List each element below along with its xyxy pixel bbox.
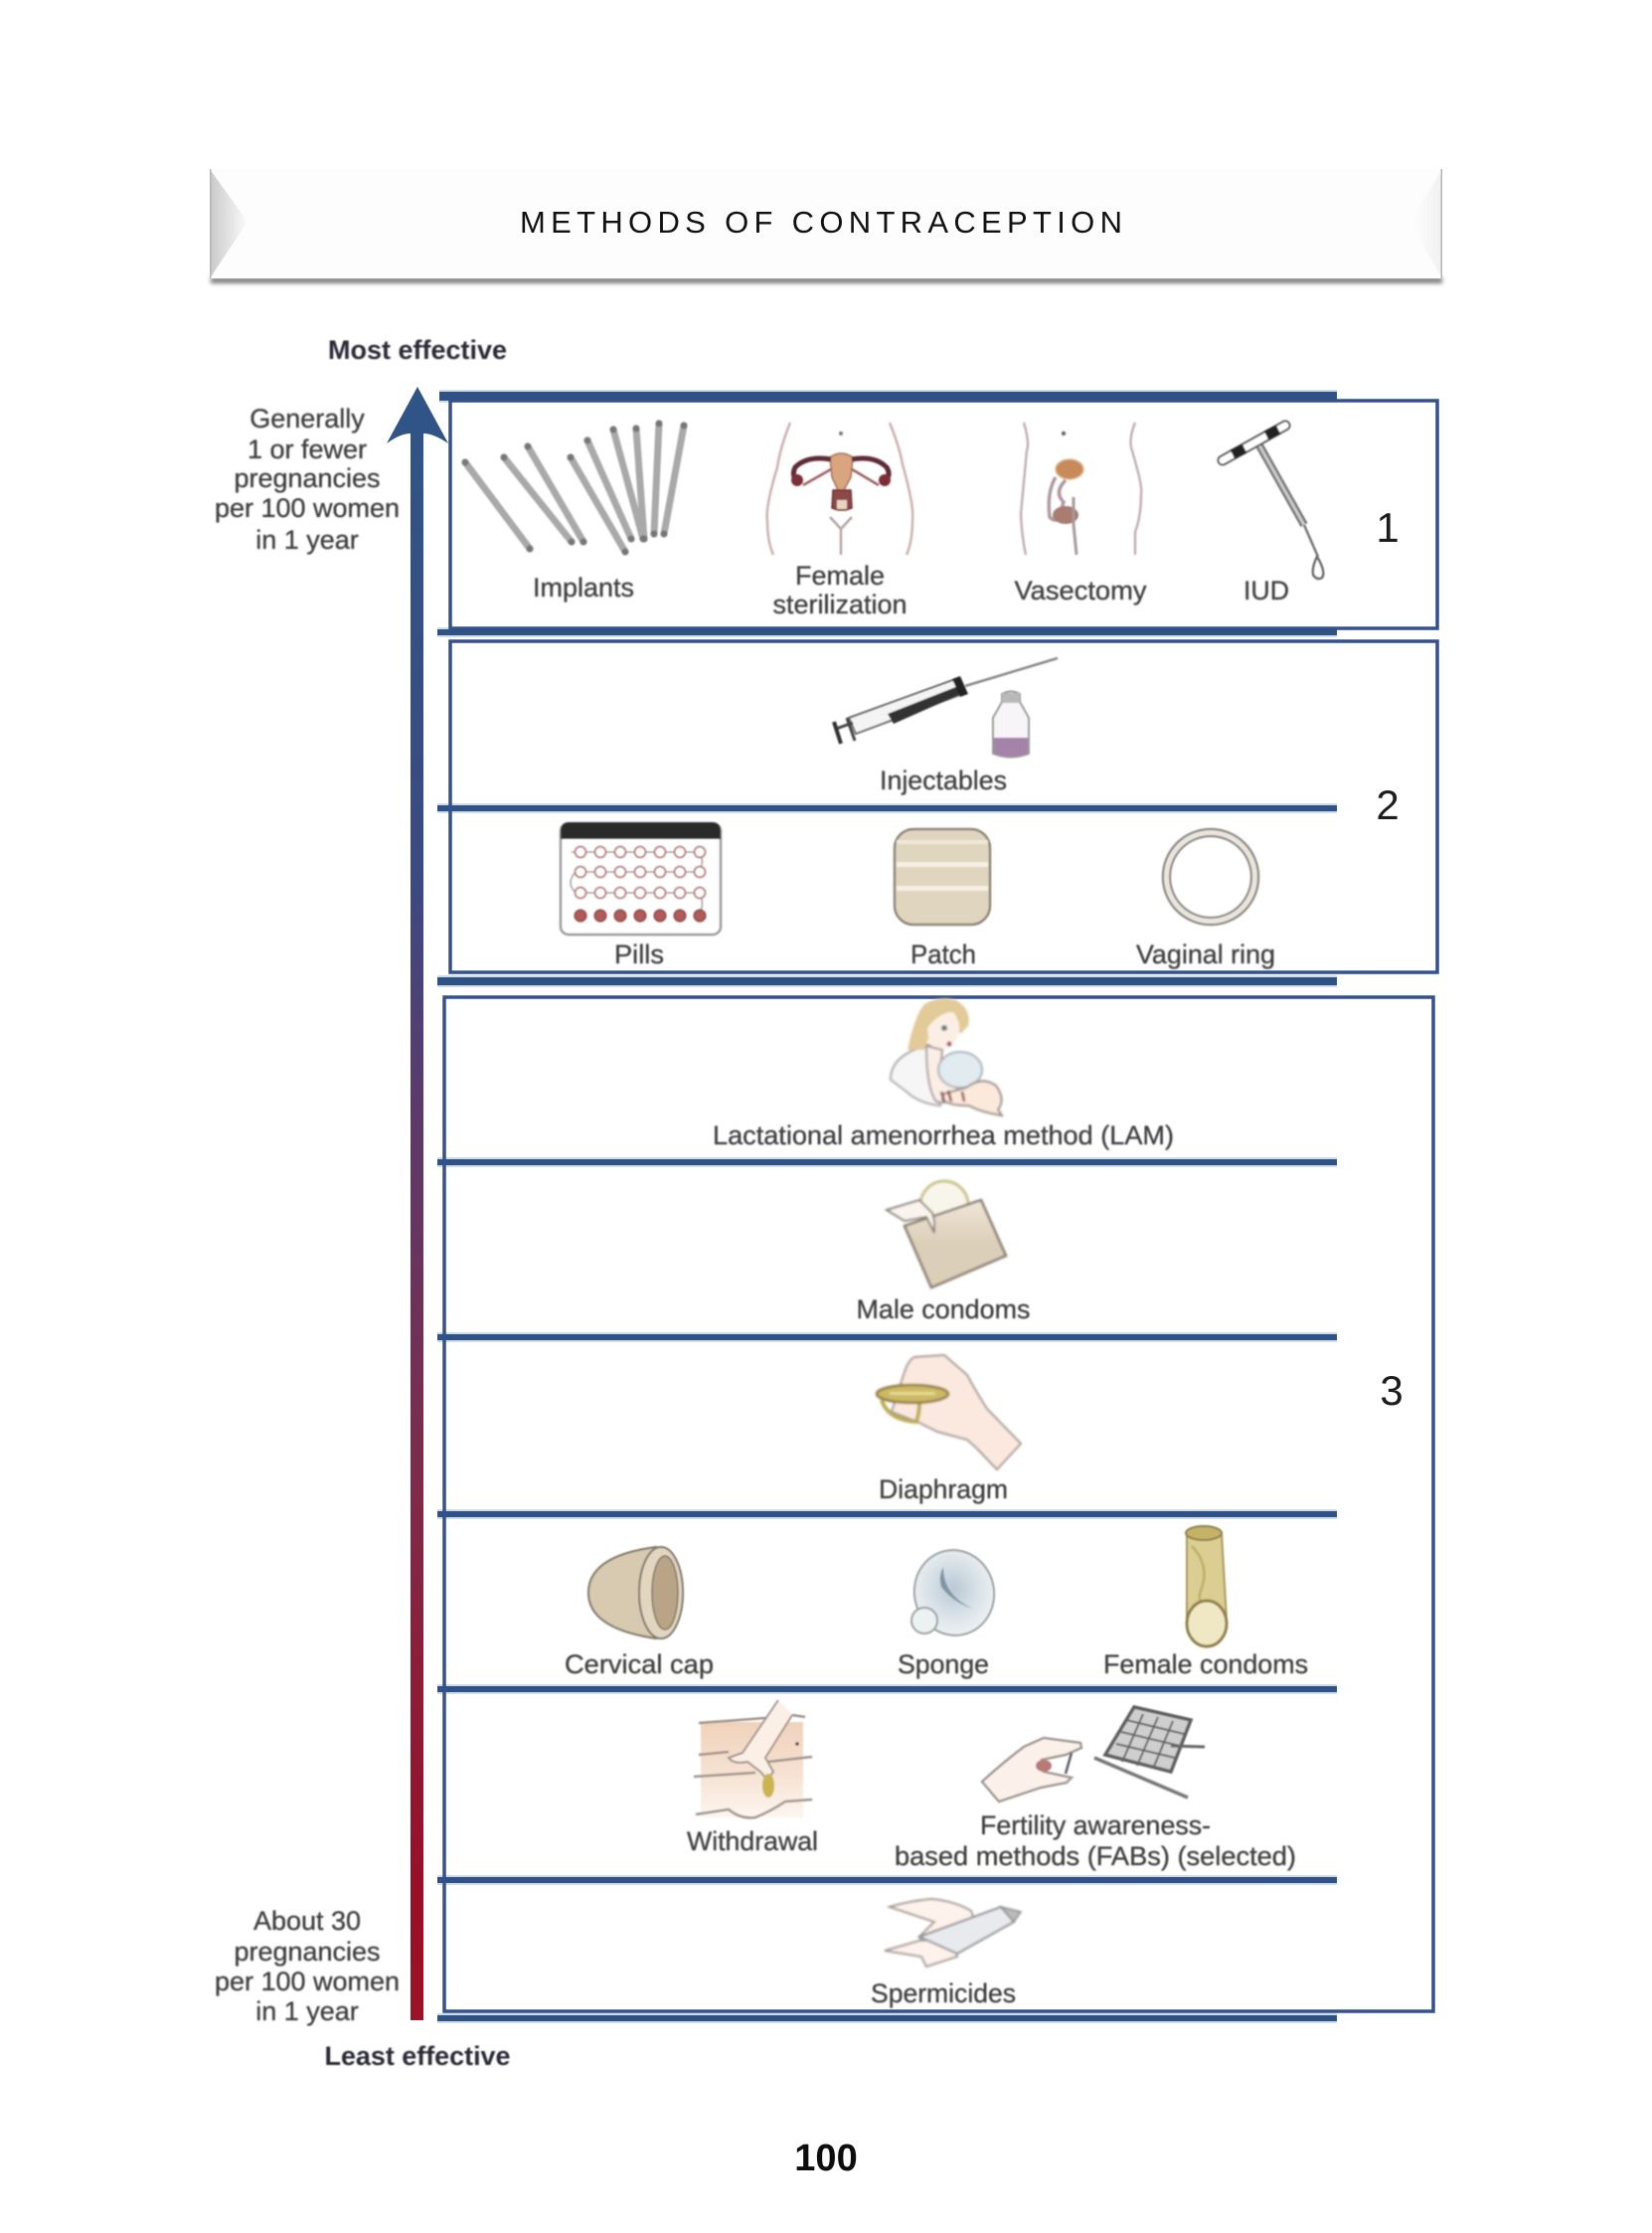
panel: tier 1	[450, 401, 1437, 628]
icon: sponge	[907, 1543, 1002, 1642]
label: diaphragm: Diaphragm	[879, 1474, 1008, 1504]
icon: IUD	[1223, 426, 1323, 579]
label: spermicides: Spermicides	[871, 1978, 1016, 2008]
text: least effective rate	[215, 1906, 400, 2026]
icon: pill pack	[561, 822, 721, 935]
effectiveness arrow	[387, 387, 448, 2020]
label: cervical cap: Cervical cap	[565, 1649, 714, 1679]
icon: withdrawal	[694, 1700, 812, 1817]
icon: implants	[461, 420, 688, 555]
text: most effective rate: per 100 women	[215, 493, 400, 523]
icon: female sterilization	[767, 423, 912, 555]
text: least effective rate: pregnancies	[234, 1937, 381, 1967]
label: male condoms: Male condoms	[857, 1294, 1030, 1324]
panel: tier 2	[450, 641, 1437, 972]
label: fertility awareness-based methods	[895, 1810, 1296, 1871]
label: injectables: Injectables	[880, 766, 1007, 795]
label: fertility awareness-based methods: based methods (FABs) (selected)	[895, 1841, 1296, 1871]
label: patch: Patch	[910, 940, 976, 969]
icon: patch	[895, 829, 990, 925]
title banner	[210, 169, 1442, 283]
tier number 2: 2	[1376, 781, 1400, 828]
label: female condoms: Female condoms	[1103, 1649, 1308, 1679]
icon: vaginal ring	[1163, 829, 1258, 925]
label: IUD: IUD	[1243, 576, 1289, 605]
icon: male condom packet	[887, 1181, 1006, 1288]
tier number 1: 1	[1376, 504, 1400, 551]
page number: 100	[794, 2138, 858, 2179]
tier number 3: 3	[1380, 1367, 1404, 1414]
label: lactational amenorrhea method: Lactational amenorrhea method (LAM)	[713, 1120, 1174, 1150]
label: female sterilization: Female	[795, 561, 885, 591]
icon: lactational amenorrhea, mother and baby	[891, 998, 1002, 1116]
icon: fertility awareness hand and calendar	[982, 1707, 1205, 1802]
icon: diaphragm in hand	[877, 1355, 1021, 1469]
text: most effective rate: in 1 year	[255, 525, 359, 555]
text: most effective rate	[215, 404, 400, 555]
text: least effective rate: in 1 year	[255, 1996, 359, 2026]
label: vasectomy: Vasectomy	[1014, 576, 1147, 605]
label: female sterilization	[773, 561, 907, 619]
icon: spermicide applicator	[885, 1899, 1021, 1967]
icon: vasectomy	[1021, 423, 1141, 555]
text: most effective rate: 1 or fewer	[248, 434, 367, 464]
icon: injectable syringe and vial	[834, 658, 1058, 758]
label: withdrawal: Withdrawal	[687, 1826, 818, 1856]
text: most effective rate: Generally	[249, 404, 365, 433]
text: most effective rate: pregnancies	[234, 463, 381, 493]
label: pills: Pills	[614, 940, 664, 969]
label: vaginal ring: Vaginal ring	[1136, 940, 1275, 969]
text: least effective rate: per 100 women	[215, 1967, 400, 1996]
title text: METHODS OF CONTRACEPTION	[520, 205, 1122, 240]
panel: tier 3	[444, 997, 1433, 2011]
label: female sterilization: sterilization	[773, 590, 907, 619]
label: fertility awareness-based methods: Fertility awareness-	[980, 1810, 1211, 1840]
label: sponge: Sponge	[898, 1649, 989, 1679]
icon: female condom	[1186, 1526, 1227, 1646]
icon: cervical cap	[588, 1547, 683, 1638]
heading: most effective: Most effective	[328, 335, 507, 365]
heading: least effective: Least effective	[324, 2041, 511, 2071]
label: implants: Implants	[533, 573, 634, 602]
text: least effective rate: About 30	[253, 1906, 361, 1936]
